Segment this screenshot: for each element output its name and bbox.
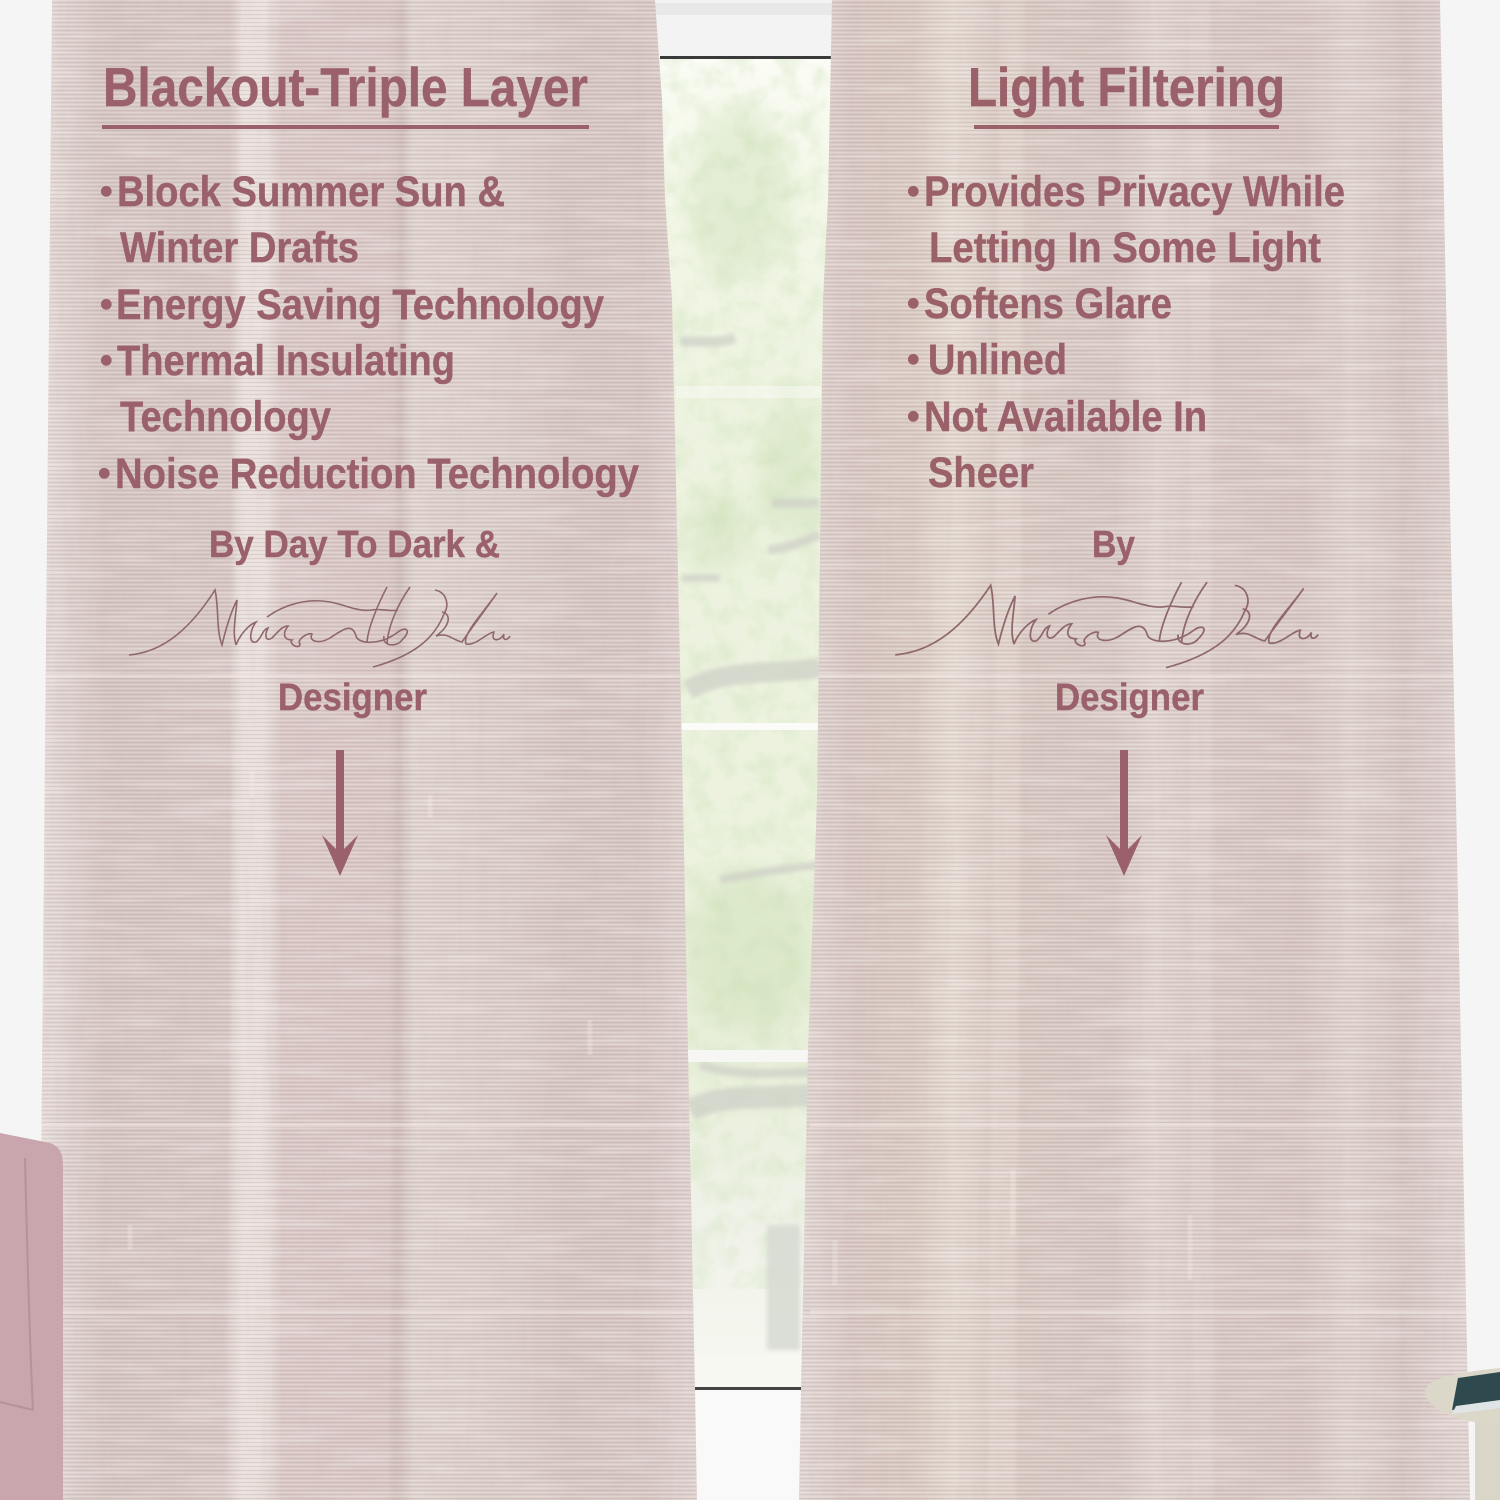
feature list: Noise Reduction Technology [115,450,639,498]
armchair at lower left [0,1133,63,1500]
feature list: • [907,170,920,211]
feature list: Energy Saving Technology [116,281,604,329]
feature list [907,168,1345,497]
window view: trees [655,0,835,1500]
side table with book at lower right [1425,1368,1500,1500]
feature list: • [907,338,920,379]
feature list: Thermal Insulating [117,337,455,385]
designer label: Designer [278,677,427,719]
panel: left curtain [38,0,697,1500]
feature list: • [100,339,113,380]
credit line: By Day To Dark & [209,524,500,566]
feature list: • [100,170,113,211]
feature list: Block Summer Sun & [117,168,505,216]
feature list: Sheer [928,449,1034,497]
heading underline [102,125,589,129]
feature list: Not Available In [924,393,1207,441]
heading: Light Filtering: Light Filtering [968,56,1285,118]
feature list: Unlined [928,336,1067,384]
feature list [98,168,639,498]
feature list: • [907,282,920,323]
signature [895,582,1318,668]
credit line: By [1092,524,1135,566]
designer label: Designer [1055,677,1204,719]
feature list: Winter Drafts [120,224,359,272]
feature list: Softens Glare [924,280,1172,328]
signature [129,587,510,667]
arrow pointing down [1106,750,1142,876]
heading: Blackout-Triple Layer: Blackout-Triple Layer [103,56,588,118]
feature list: Letting In Some Light [929,224,1321,272]
panel: light filtering features [895,56,1345,876]
panel: blackout features [98,56,639,876]
feature list: Technology [120,393,331,441]
heading underline [974,125,1279,129]
feature list: • [907,395,920,436]
feature list: Provides Privacy While [924,168,1345,216]
panel: right curtain [799,0,1470,1500]
feature list: • [100,283,113,324]
feature list: • [98,452,111,493]
arrow pointing down [322,750,358,876]
